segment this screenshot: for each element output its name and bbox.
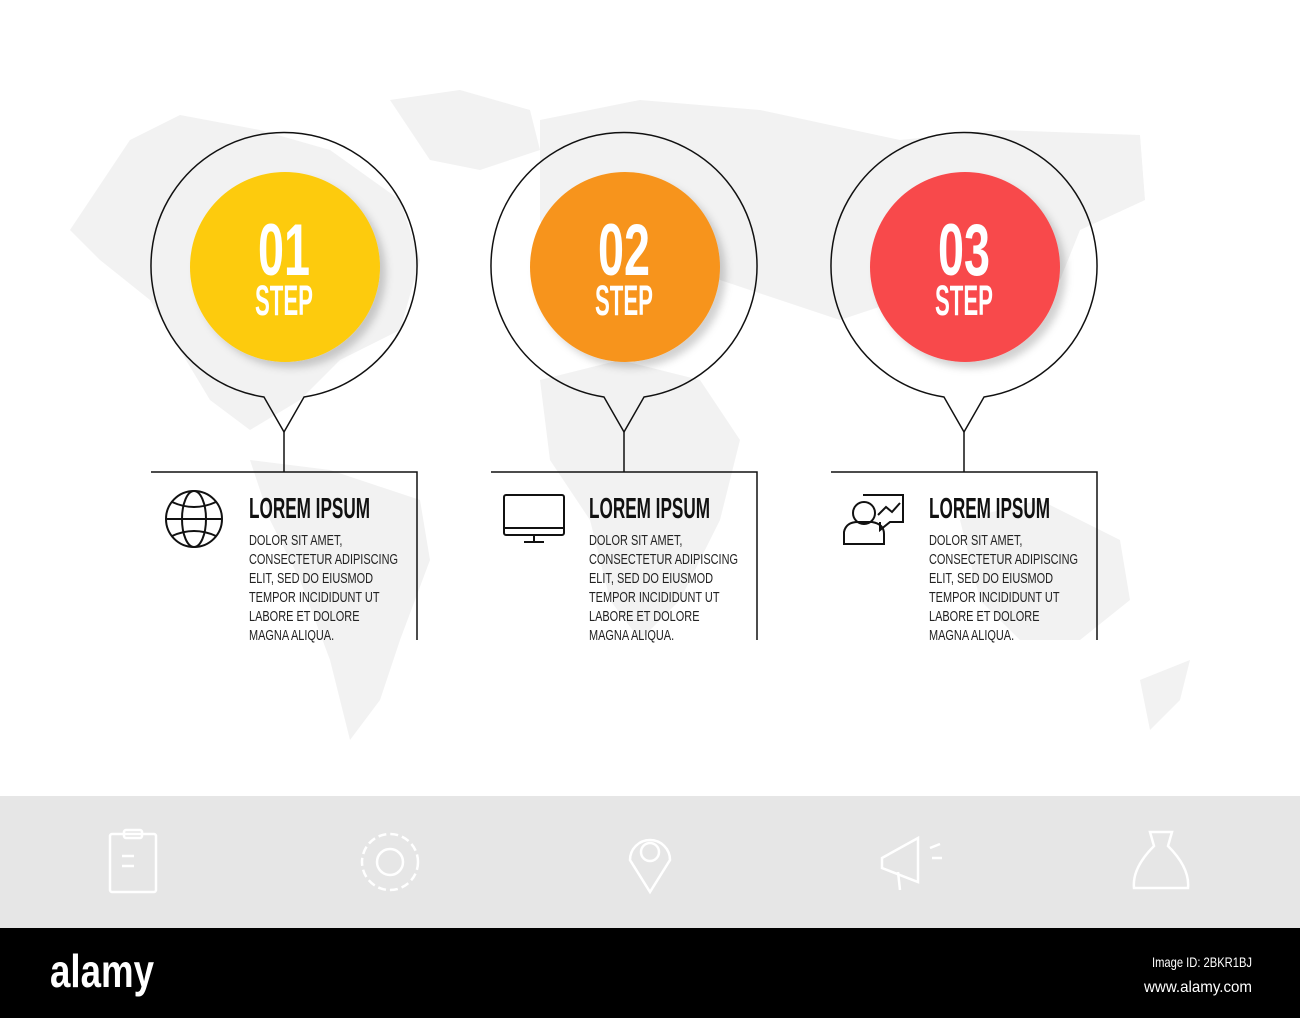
text blocks: DOLOR SIT AMET, <box>929 531 1022 548</box>
step 1: 01 <box>258 210 310 291</box>
text blocks: TEMPOR INCIDIDUNT UT <box>249 588 380 605</box>
text blocks: CONSECTETUR ADIPISCING <box>249 550 398 567</box>
step 3 <box>831 133 1097 640</box>
step 3: STEP <box>935 277 993 325</box>
text blocks: ELIT, SED DO EIUSMOD <box>929 569 1053 586</box>
icon: globe <box>166 491 222 547</box>
footer bar: www.alamy.com <box>1143 979 1252 996</box>
text blocks: LOREM IPSUM <box>249 493 370 525</box>
step 2 <box>491 133 757 640</box>
text blocks: MAGNA ALIQUA. <box>249 626 334 643</box>
icon: presenter <box>844 495 903 544</box>
text blocks: ELIT, SED DO EIUSMOD <box>249 569 373 586</box>
text blocks: ELIT, SED DO EIUSMOD <box>589 569 713 586</box>
background world map <box>70 90 1190 740</box>
icon: monitor <box>504 495 564 542</box>
step 2: 02 <box>598 210 650 291</box>
step 1: STEP <box>255 277 313 325</box>
bottom icon band <box>0 796 1300 928</box>
text blocks: LABORE ET DOLORE <box>249 607 360 624</box>
step 1 <box>151 133 417 640</box>
step 2: STEP <box>595 277 653 325</box>
text blocks: LABORE ET DOLORE <box>589 607 700 624</box>
footer bar: alamy <box>50 945 154 997</box>
text blocks <box>249 493 1078 643</box>
text blocks: TEMPOR INCIDIDUNT UT <box>929 588 1060 605</box>
text blocks: DOLOR SIT AMET, <box>589 531 682 548</box>
text blocks: CONSECTETUR ADIPISCING <box>929 550 1078 567</box>
text blocks: DOLOR SIT AMET, <box>249 531 342 548</box>
footer bar: Image ID: 2BKR1BJ <box>1152 954 1252 970</box>
text blocks: LOREM IPSUM <box>929 493 1050 525</box>
text blocks: MAGNA ALIQUA. <box>589 626 674 643</box>
text blocks: LOREM IPSUM <box>589 493 710 525</box>
footer bar <box>0 928 1300 1018</box>
text blocks: LABORE ET DOLORE <box>929 607 1040 624</box>
step 3: 03 <box>938 210 990 291</box>
text blocks: TEMPOR INCIDIDUNT UT <box>589 588 720 605</box>
text blocks: CONSECTETUR ADIPISCING <box>589 550 738 567</box>
text blocks: MAGNA ALIQUA. <box>929 626 1014 643</box>
